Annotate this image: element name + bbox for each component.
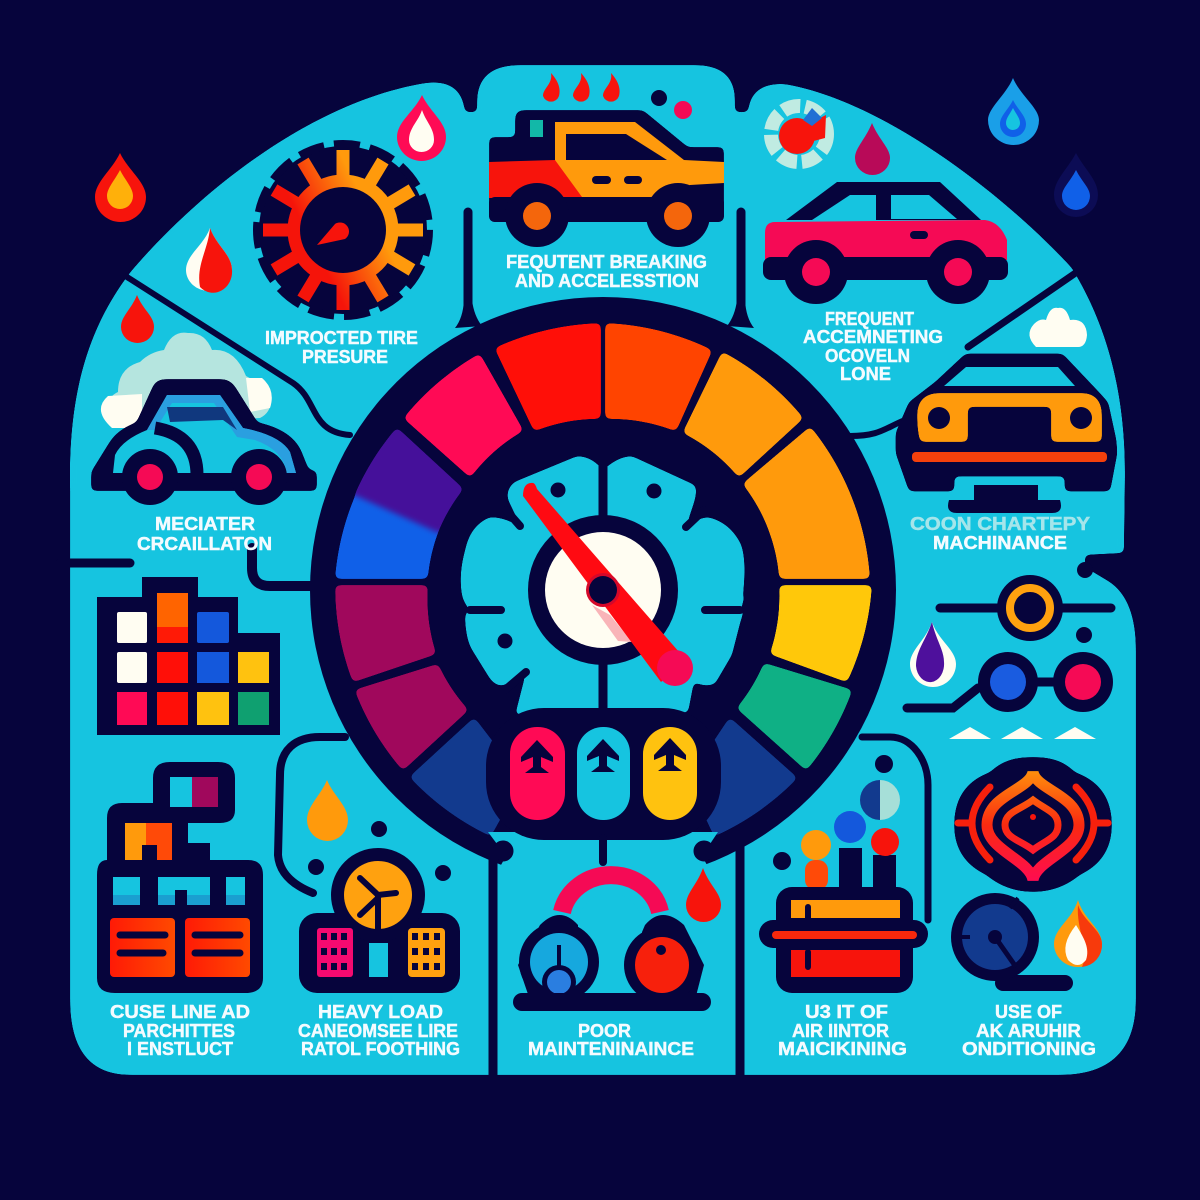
icon: front-view car (897, 355, 1116, 513)
gauge inner teal lobes (461, 456, 745, 715)
drop: pink and white (397, 95, 446, 161)
label: cruise line (110, 1002, 250, 1059)
icon: orange truck (489, 110, 724, 247)
icon: engine with balls (759, 755, 928, 993)
drop: flame (1054, 900, 1102, 967)
icon: poor maintenance gauges (513, 875, 711, 1011)
drop: red and yellow (95, 153, 146, 222)
gauge needle (523, 483, 693, 686)
gauge bottom opening (486, 832, 722, 892)
label: good maintenance (910, 514, 1090, 553)
icon: triangles (949, 727, 1096, 739)
label: improper tire pressure: IMPROCTED TIRE (265, 328, 418, 348)
label: improper tire pressure: PRESURE (302, 347, 388, 367)
label: frequent accelerating: LONE (840, 364, 891, 384)
drop: purple and white (910, 622, 956, 687)
label: poor maintenance: POOR (578, 1021, 631, 1041)
drop: maroon (855, 123, 890, 175)
label: good maintenance: COON CHARTEPY (910, 514, 1090, 534)
drop: red and white (186, 228, 232, 293)
icon: color grid (97, 577, 280, 735)
label: poor maintenance: MAINTENINAINCE (528, 1039, 694, 1059)
label: frequent braking: FEQUTENT BREAKING (506, 252, 707, 272)
label: heavy load (298, 1002, 460, 1059)
label: frequent braking (506, 252, 707, 291)
icon: small dial (951, 893, 1073, 991)
drop: dark blue (1054, 153, 1098, 217)
label: use of air filter: U3 IT OF (805, 1002, 888, 1022)
drop: orange (307, 780, 348, 841)
small stem (599, 838, 607, 862)
gauge (310, 297, 896, 1080)
label: frequent accelerating: OCOVELN (825, 346, 910, 366)
label: use of air filter: AIR IINTOR (792, 1021, 889, 1041)
label: use of air conditioning: ONDITIONING (962, 1039, 1096, 1059)
label: frequent accelerating (803, 309, 943, 384)
icon: right cloud (1029, 308, 1087, 347)
label: use of air conditioning (962, 1002, 1096, 1059)
panel dividers (60, 212, 1077, 920)
icon: top dots (651, 90, 692, 119)
gauge dark ring (310, 297, 896, 883)
drop: red bottom (686, 868, 721, 922)
label: poor maintenance (528, 1021, 694, 1059)
icon: small gauge badge (771, 106, 827, 162)
panel: teal dome background (70, 65, 1136, 1075)
icon: pink car (763, 182, 1008, 304)
icon: building blocks (97, 762, 263, 993)
label: mechanical circulation (137, 514, 272, 554)
label: good maintenance: MACHINANCE (933, 533, 1067, 553)
icon: blue car with cloud (92, 333, 316, 505)
label: mechanical circulation: MECIATER (155, 514, 255, 534)
label: mechanical circulation: CRCAILLATON (137, 534, 272, 554)
label: cruise line: CUSE LINE AD (110, 1002, 250, 1022)
label: frequent accelerating: ACCEMNETING (803, 327, 943, 347)
icon: concentric flower (954, 757, 1112, 892)
label: frequent braking: AND ACCELESSTION (515, 271, 699, 291)
gauge colored segments (337, 325, 870, 834)
label: use of air conditioning: USE OF (995, 1002, 1062, 1022)
label: heavy load: RATOL FOOTHING (301, 1039, 460, 1059)
drop: blue ring (988, 78, 1039, 145)
label: use of air filter: MAICIKINING (778, 1039, 907, 1059)
icon: flames above truck (543, 73, 620, 102)
label: use of air filter (778, 1002, 907, 1059)
gauge hub disc (528, 515, 678, 665)
gauge control pill (486, 708, 721, 840)
icon: heavy load (299, 821, 460, 993)
label: cruise line: PARCHITTES (123, 1021, 235, 1041)
gauge ring ends and stems (493, 841, 740, 1080)
label: cruise line: I ENSTLUCT (127, 1039, 233, 1059)
label: use of air conditioning: AK ARUHIR (976, 1021, 1081, 1041)
icon: circuit nodes (907, 562, 1113, 712)
cloud (101, 333, 272, 428)
label: heavy load: HEAVY LOAD (318, 1002, 443, 1022)
icon: tire pressure gear (257, 144, 429, 316)
gauge inner slits and dots (470, 462, 740, 712)
label: improper tire pressure (265, 328, 418, 367)
label: heavy load: CANEOMSEE LIRE (298, 1021, 458, 1041)
label: frequent accelerating: FREQUENT (825, 309, 914, 329)
drop: red small (121, 295, 154, 343)
